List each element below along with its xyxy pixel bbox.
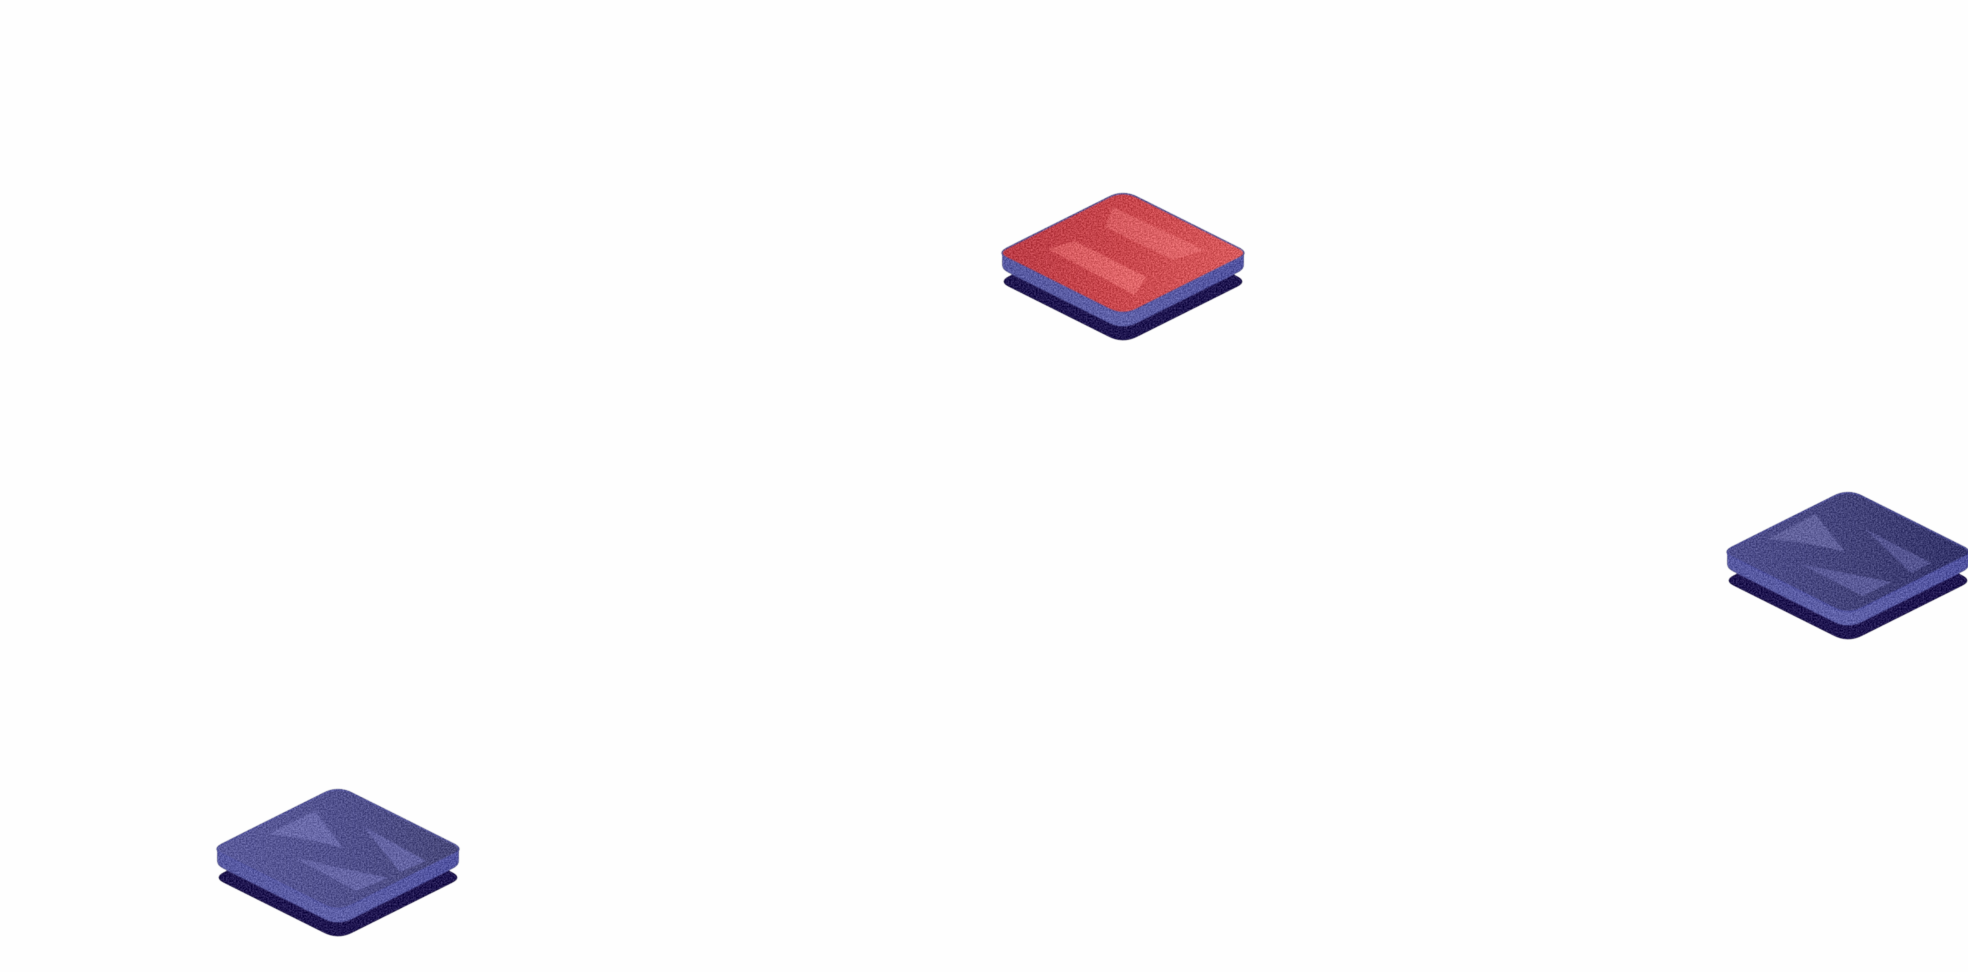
tile side wall	[1727, 550, 1968, 626]
M glyph facet: right	[1865, 529, 1931, 573]
tile: red pause icon	[1002, 194, 1244, 340]
M glyph facet: bottom	[295, 858, 388, 891]
tile top face	[1727, 492, 1968, 612]
tile top face	[1002, 194, 1244, 312]
tile: blue M icon, lower left	[217, 790, 459, 936]
tile shadow	[1728, 522, 1968, 640]
pause bar: upper right	[1105, 207, 1204, 260]
M glyph facet: bottom	[1800, 564, 1891, 596]
tile shadow	[1004, 222, 1242, 340]
tile side wall	[1002, 251, 1244, 326]
M glyph facet: right	[363, 826, 426, 872]
tile top face	[217, 790, 459, 908]
M glyph facet: left	[268, 811, 343, 848]
tile side wall	[217, 847, 459, 922]
tile shadow	[218, 818, 458, 936]
tile: dark blue M icon, right	[1727, 492, 1968, 640]
pause bar: lower left	[1048, 241, 1146, 295]
M glyph facet: left	[1768, 514, 1845, 552]
